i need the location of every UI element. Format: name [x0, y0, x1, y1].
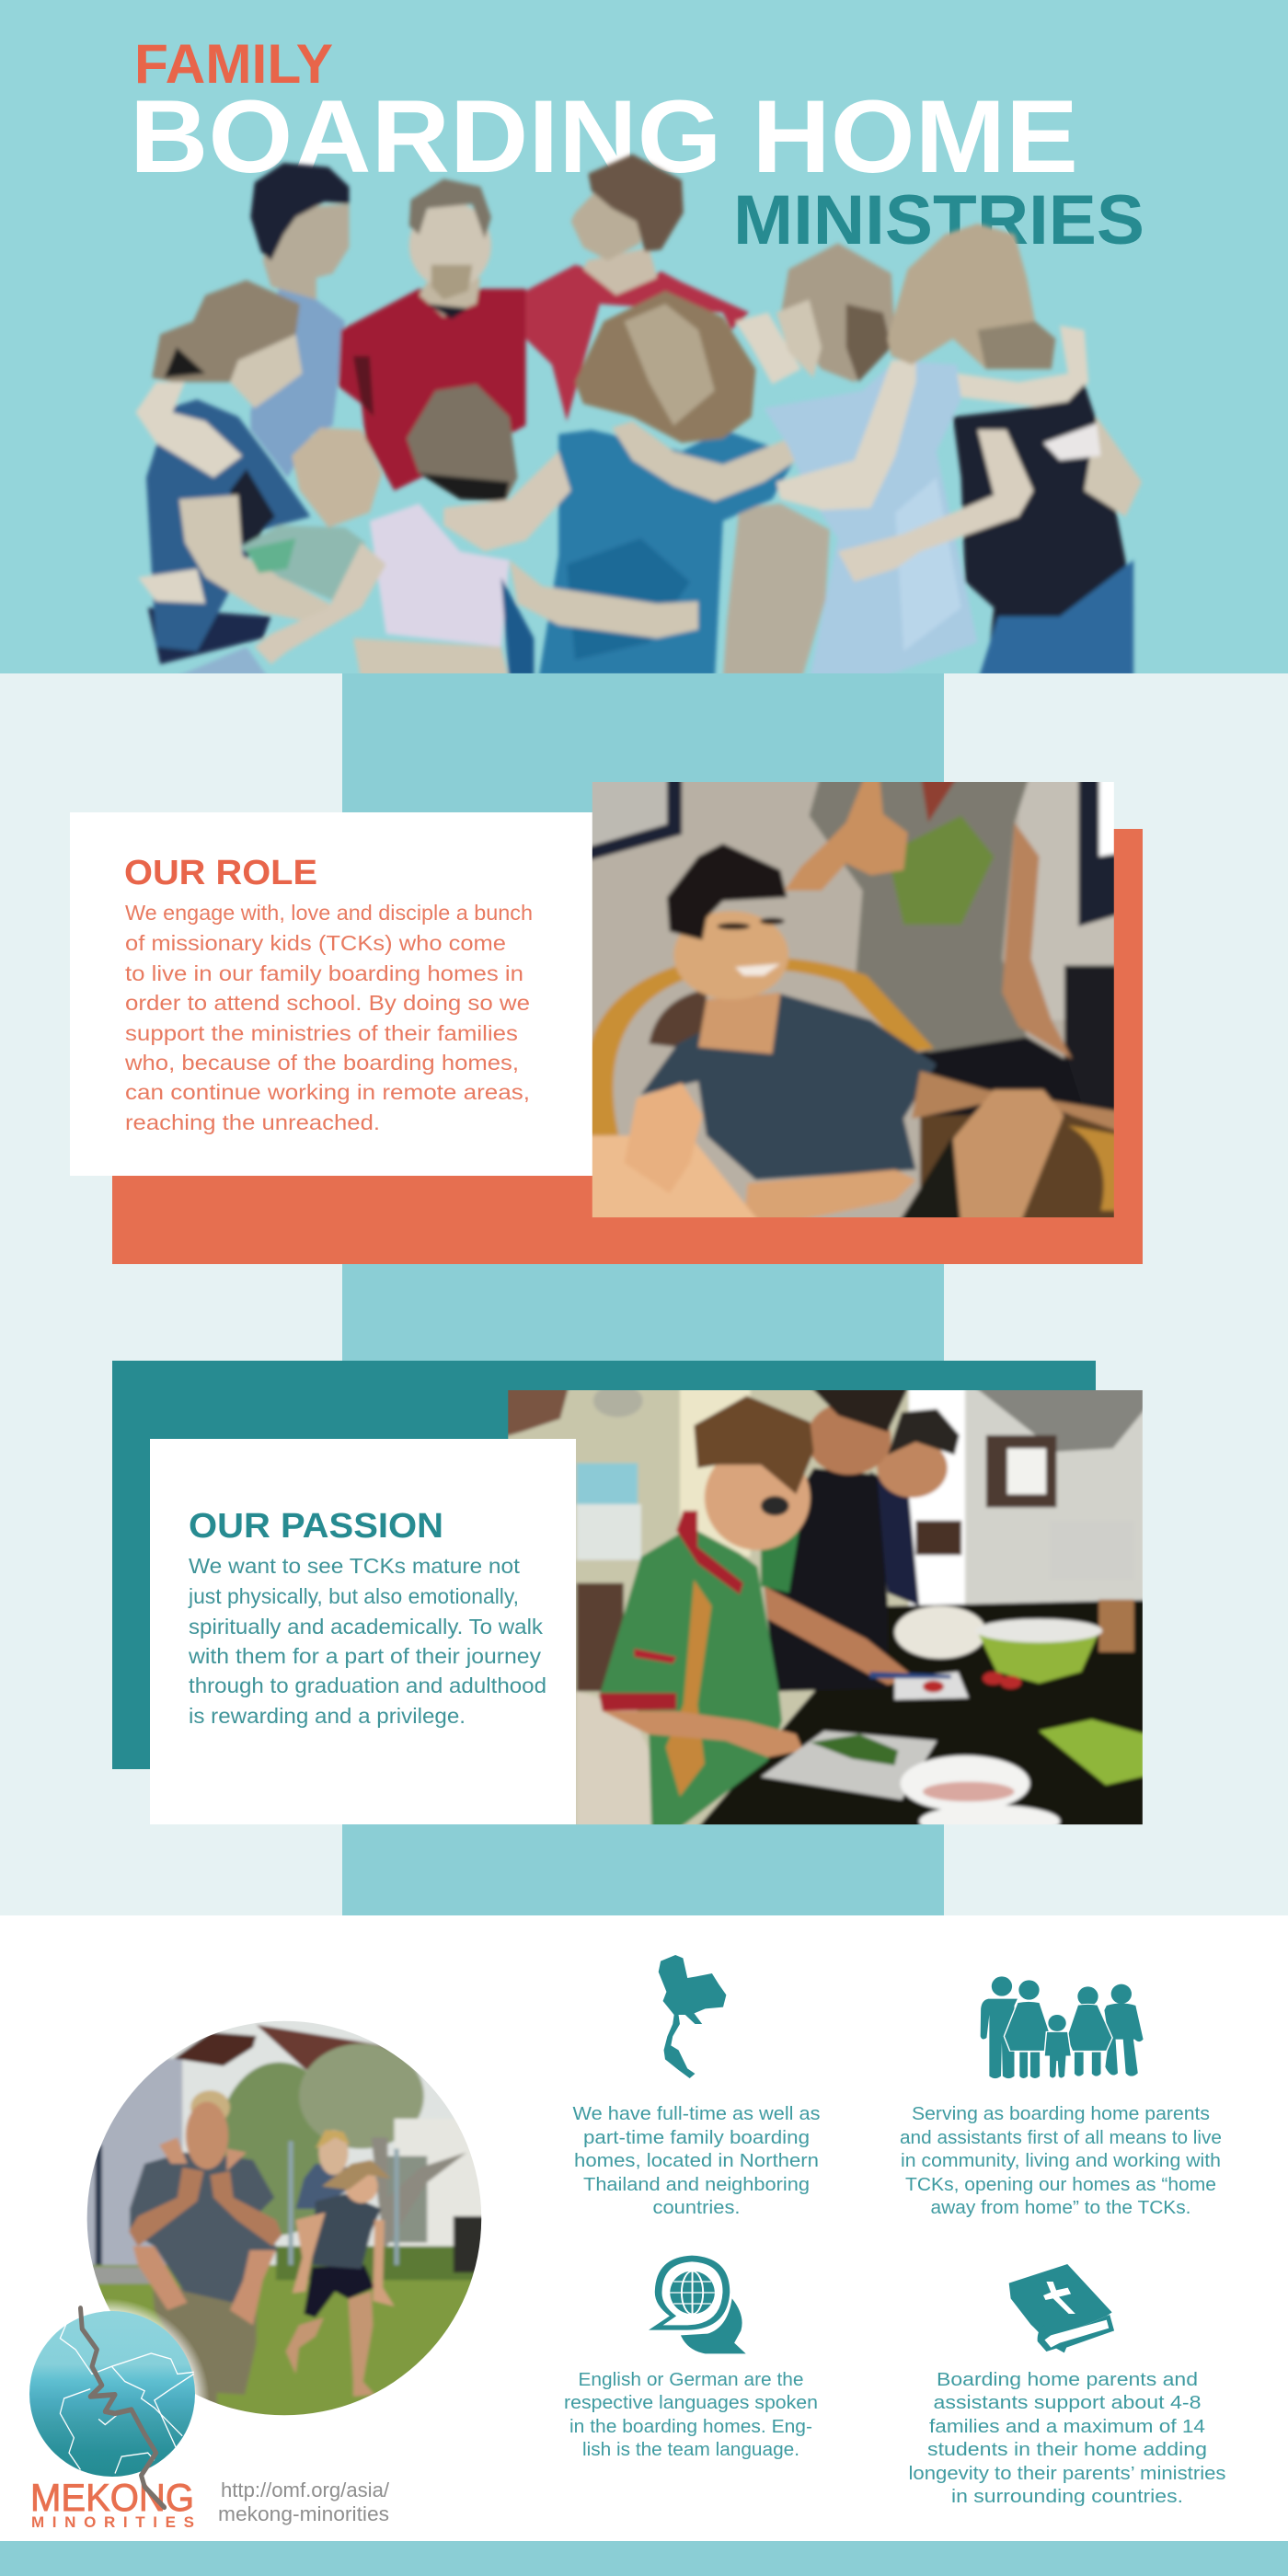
text: languages: lish is the team language. — [582, 2439, 799, 2460]
text: website url: mekong-minorities — [218, 2502, 389, 2525]
panel: our passion — [112, 1361, 1169, 1837]
text: languages — [564, 2369, 818, 2460]
white text card — [70, 812, 592, 1176]
heading: our role: OUR ROLE — [124, 854, 317, 892]
text: community: TCKs, opening our homes as “home — [905, 2174, 1216, 2195]
feature: languages — [564, 2256, 818, 2460]
orange backing block — [112, 829, 1143, 1264]
text: role description: who, because of the boarding homes, — [124, 1051, 519, 1075]
background: bottom band — [0, 2541, 1288, 2576]
feature: community — [900, 1976, 1222, 2218]
text: community: Serving as boarding home parents — [912, 2103, 1210, 2124]
text: community: in community, living and working with — [901, 2150, 1221, 2171]
text: community: and assistants first of all means to live — [900, 2127, 1222, 2148]
text: role description: of missionary kids (TCKs) who come — [125, 931, 506, 955]
text: support: longevity to their parents’ ministries — [909, 2463, 1225, 2484]
text: support: students in their home adding — [927, 2439, 1207, 2460]
text: languages: respective languages spoken — [564, 2392, 818, 2413]
teal backing block — [112, 1361, 1096, 1769]
text: passion description: is rewarding and a privilege. — [189, 1704, 466, 1728]
feature: support — [909, 2264, 1225, 2507]
title: family: FAMILY — [134, 33, 333, 95]
photo: piggyback race circle — [86, 2020, 482, 2416]
text: support — [909, 2369, 1225, 2507]
logo map borders — [60, 2321, 194, 2474]
text: role description: to live in our family boarding homes in — [125, 961, 523, 985]
text: locations: We have full-time as well as — [572, 2103, 821, 2124]
text: support: assistants support about 4-8 — [933, 2392, 1202, 2413]
logo river — [80, 2308, 165, 2507]
text: passion description: just physically, but also emotionally, — [188, 1584, 519, 1608]
background: central strip — [342, 673, 944, 1915]
background: footer — [0, 1915, 1288, 2541]
title: ministries: MINISTRIES — [733, 181, 1144, 259]
text: support: families and a maximum of 14 — [929, 2416, 1205, 2437]
text: support: in surrounding countries. — [951, 2486, 1183, 2507]
photo: group hug — [135, 155, 1142, 682]
panel: hero header — [0, 0, 1288, 682]
logo: mekong minorities — [4, 2298, 210, 2531]
text: website url — [218, 2478, 390, 2525]
text: community — [900, 2103, 1222, 2218]
text: community: away from home” to the TCKs. — [931, 2197, 1190, 2218]
text: support: Boarding home parents and — [937, 2369, 1198, 2390]
text: passion description: We want to see TCKs mature not — [189, 1554, 520, 1578]
text: locations: part-time family boarding — [583, 2127, 810, 2148]
text: locations: Thailand and neighboring — [583, 2174, 810, 2195]
text: role description: order to attend school. By doing so we — [125, 991, 530, 1015]
text: passion description: through to graduation and adulthood — [189, 1673, 546, 1697]
text: locations: countries. — [653, 2197, 740, 2218]
text: languages: English or German are the — [578, 2369, 804, 2390]
heading: our passion: OUR PASSION — [189, 1507, 443, 1546]
text: languages: in the boarding homes. Eng- — [569, 2416, 812, 2437]
title: boarding home: BOARDING HOME — [130, 79, 1078, 194]
text: website url: http://omf.org/asia/ — [221, 2478, 390, 2501]
photo: smiling boy in chair — [592, 782, 1114, 1218]
white text card — [150, 1439, 576, 1824]
panel: our role — [70, 771, 1143, 1264]
text: passion description: with them for a part of their journey — [188, 1644, 541, 1668]
text: role description: We engage with, love and disciple a bunch — [125, 901, 533, 925]
text: locations — [572, 2103, 821, 2218]
feature: locations — [572, 1955, 821, 2218]
text: passion description: spiritually and academically. To walk — [189, 1615, 543, 1639]
logo circle map — [29, 2311, 195, 2477]
text: passion description — [188, 1554, 546, 1728]
icon: family — [981, 1976, 1144, 2078]
text: locations: homes, located in Northern — [574, 2150, 819, 2171]
icon: bible — [1009, 2264, 1114, 2352]
logo halo — [4, 2298, 210, 2504]
icon: thailand map — [659, 1955, 726, 2078]
background: middle section — [0, 673, 1288, 1915]
text: role description: support the ministries of their families — [125, 1021, 518, 1045]
logo wordmark: mekong: MEKONG — [30, 2476, 194, 2519]
photo: kids cooking — [508, 1390, 1143, 1825]
text: role description: reaching the unreached. — [125, 1110, 380, 1134]
text: role description — [124, 901, 533, 1134]
icon: globe speech bubbles — [649, 2256, 746, 2353]
logo wordmark: minorities: MINORITIES — [31, 2513, 194, 2531]
text: role description: can continue working in remote areas, — [125, 1080, 530, 1104]
